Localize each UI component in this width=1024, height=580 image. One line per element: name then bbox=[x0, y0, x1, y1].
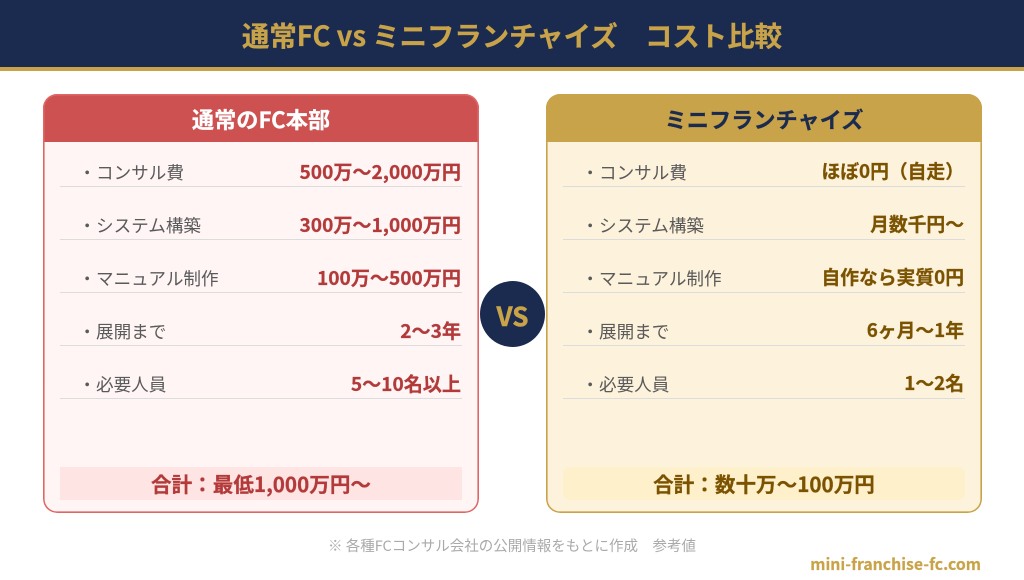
panel heading: regular FC: 通常のFC本部 bbox=[192, 103, 330, 135]
title banner bbox=[0, 0, 1024, 71]
row: required staff: ・必要人員 bbox=[581, 372, 669, 397]
row: manual production: 自作なら実質0円 bbox=[821, 263, 964, 290]
row: required staff bbox=[563, 365, 965, 399]
panel heading: mini franchise: ミニフランチャイズ bbox=[665, 103, 863, 135]
row: consulting fee bbox=[60, 153, 462, 187]
panel outline: regular FC bbox=[43, 94, 479, 513]
row: system build: ・システム構築 bbox=[581, 213, 704, 238]
panel heading: regular FC bbox=[43, 94, 479, 142]
row: manual production bbox=[563, 259, 965, 293]
row: time to rollout: ・展開まで bbox=[581, 319, 669, 344]
row: consulting fee: ほぼ0円（自走） bbox=[821, 157, 964, 184]
row: system build bbox=[60, 206, 462, 240]
row: system build: ・システム構築 bbox=[78, 213, 201, 238]
row: required staff bbox=[60, 365, 462, 399]
VS badge: VS bbox=[496, 297, 528, 334]
row: system build bbox=[563, 206, 965, 240]
row: time to rollout bbox=[563, 312, 965, 346]
row: time to rollout bbox=[60, 312, 462, 346]
row: required staff: 1〜2名 bbox=[904, 369, 964, 396]
row: system build: 300万〜1,000万円 bbox=[300, 210, 461, 238]
row: manual production bbox=[60, 259, 462, 293]
row: consulting fee: ・コンサル費 bbox=[78, 160, 184, 185]
source note: ※ 各種FCコンサル会社の公開情報をもとに作成 参考値 bbox=[328, 535, 696, 556]
row: time to rollout: 6ヶ月〜1年 bbox=[867, 316, 964, 343]
total: mini franchise: 合計：数十万〜100万円 bbox=[653, 468, 875, 498]
row: time to rollout: ・展開まで bbox=[78, 319, 166, 344]
panel heading: mini franchise bbox=[546, 94, 982, 142]
row: required staff: 5〜10名以上 bbox=[351, 369, 461, 397]
VS badge bbox=[480, 281, 545, 347]
website credit: mini-franchise-fc.com bbox=[810, 552, 981, 575]
row: manual production: ・マニュアル制作 bbox=[581, 266, 722, 291]
total: mini franchise bbox=[563, 467, 965, 500]
row: system build: 月数千円〜 bbox=[870, 210, 964, 237]
row: manual production: 100万〜500万円 bbox=[317, 263, 461, 291]
row: consulting fee bbox=[563, 153, 965, 187]
panel: mini franchise bbox=[546, 94, 982, 513]
total: regular FC: 合計：最低1,000万円〜 bbox=[151, 468, 371, 498]
row: required staff: ・必要人員 bbox=[78, 372, 166, 397]
row: manual production: ・マニュアル制作 bbox=[78, 266, 219, 291]
row: time to rollout: 2〜3年 bbox=[400, 316, 461, 344]
total: regular FC bbox=[60, 467, 462, 500]
panel: regular FC headquarters bbox=[43, 94, 479, 513]
row: consulting fee: ・コンサル費 bbox=[581, 160, 687, 185]
title: 通常FC vs ミニフランチャイズ コスト比較 bbox=[242, 14, 782, 54]
panel outline: mini franchise bbox=[546, 94, 982, 513]
row: consulting fee: 500万〜2,000万円 bbox=[300, 157, 461, 185]
